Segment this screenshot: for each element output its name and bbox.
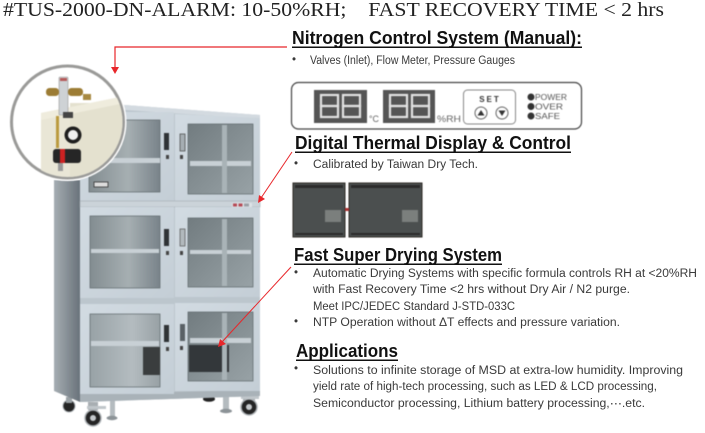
status LEDs: SAFE <box>535 112 560 121</box>
drying system text: NTP Operation without ΔT effects and pressure variation. <box>313 317 620 329</box>
set buttons: SET <box>479 95 501 104</box>
drying system text: • <box>294 267 298 279</box>
middle doors <box>80 207 260 298</box>
arrow: drying system to cabinet <box>218 267 291 347</box>
applications text <box>294 363 683 410</box>
status LEDs: POWER <box>535 93 567 102</box>
status LEDs: OVER <box>535 102 563 112</box>
product photos: drying units <box>293 183 422 237</box>
unit labels: %RH <box>437 114 461 124</box>
heading: nitrogen control system: Nitrogen Control System (Manual): <box>292 28 582 48</box>
display text: • <box>294 158 298 170</box>
cabinet body <box>54 105 260 402</box>
control strip <box>80 201 260 207</box>
display text: Calibrated by Taiwan Dry Tech. <box>313 159 478 171</box>
unit labels <box>369 114 461 124</box>
humidity digits <box>383 90 435 123</box>
set buttons <box>464 90 516 124</box>
bottom doors <box>80 303 260 394</box>
applications text: Semiconductor processing, Lithium battery processing,⋯.etc. <box>313 398 645 410</box>
heading: fast super drying system: Fast Super Drying System <box>294 245 502 265</box>
applications text: • <box>294 363 298 375</box>
nitrogen text: Valves (Inlet), Flow Meter, Pressure Gauges <box>310 55 515 67</box>
drying system text: • <box>294 316 298 328</box>
drying system text: Automatic Drying Systems with specific formula controls RH at <20%RH <box>313 268 697 280</box>
drying system text: with Fast Recovery Time <2 hrs without Dry Air / N2 purge. <box>312 284 630 296</box>
casters and feet <box>63 396 259 426</box>
heading: applications: Applications <box>296 341 398 361</box>
top doors <box>80 112 260 202</box>
unit labels: °C <box>369 114 379 124</box>
inset: nitrogen valves circle <box>8 63 126 183</box>
heading: digital thermal display: Digital Thermal Display & Control <box>295 133 571 153</box>
drying system text <box>294 267 697 329</box>
control panel graphic <box>292 82 582 129</box>
applications text: yield rate of high-tech processing, such as LED & LCD processing, <box>313 381 657 393</box>
applications text: Solutions to infinite storage of MSD at extra-low humidity. Improving <box>313 365 683 377</box>
drying system text: Meet IPC/JEDEC Standard J-STD-033C <box>313 301 515 313</box>
nitrogen text: • <box>292 54 296 66</box>
arrow: display control to strip <box>258 152 292 203</box>
temperature digits <box>314 90 367 123</box>
cabinet illustration <box>54 105 260 426</box>
status LEDs <box>528 93 567 121</box>
arrow: nitrogen control to inset <box>111 47 287 74</box>
